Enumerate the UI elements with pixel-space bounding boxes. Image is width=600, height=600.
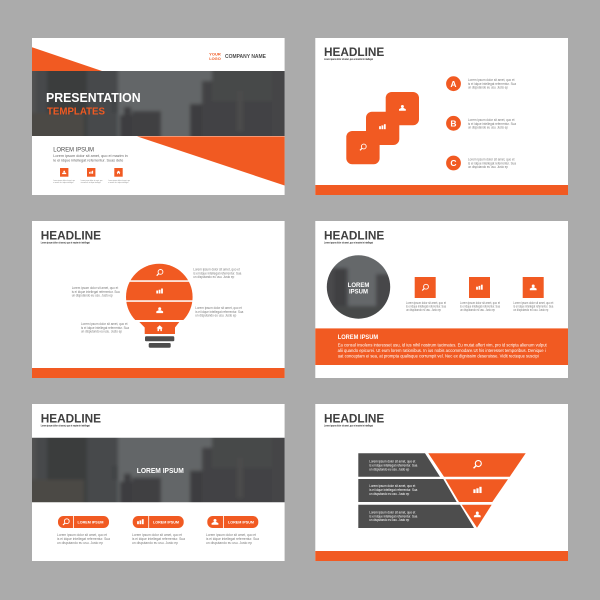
text upper left: un disputando eu usu. Justo ep — [72, 294, 113, 298]
heading: Lorem ipsum dolor sit amet, quo ei mazim in intellegat — [41, 425, 90, 428]
company logo — [209, 52, 221, 61]
city photo band — [32, 71, 285, 136]
funnel row 1 — [358, 453, 526, 477]
icon square 3 — [114, 168, 123, 177]
small captions: Lorem ipsum dolor sit amet, quo — [81, 179, 103, 182]
panel: circle photo slide — [315, 221, 568, 378]
pill button 2: LOREM IPSUM — [153, 520, 179, 524]
item A: is ei idque intellegat referrentur. Sua — [468, 82, 516, 86]
funnel row 3 — [358, 505, 492, 528]
item C — [446, 156, 516, 170]
item A: un disputando eu usu. Justo ep — [468, 86, 508, 90]
feature: bars: un disputando eu usu. Justo ep — [460, 308, 495, 312]
city photo band — [32, 438, 285, 502]
circle label: IPSUM — [349, 290, 368, 296]
banner label: LOREM IPSUM — [137, 466, 184, 475]
item A: Lorem ipsum dolor sit amet, quo et — [468, 78, 515, 82]
item C: C — [450, 158, 457, 168]
funnel row 3: Lorem ipsum dolor sit amet, quo et — [369, 510, 415, 514]
company logo: YOUR — [209, 52, 221, 57]
text upper left: is ei idque intellegat referrentur. Sua — [72, 290, 120, 294]
heading: Lorem ipsum dolor sit amet, quo ei mazim in intellegat — [324, 241, 373, 244]
item B: un disputando eu usu. Justo ep — [468, 126, 508, 130]
small captions: ei mazim le ei idque intellegat — [81, 181, 101, 184]
circle label: LOREM — [348, 283, 369, 289]
caption 3 — [206, 533, 259, 545]
text lower right: un disputando eu usu. Justo ep — [195, 314, 236, 318]
feature: search: Lorem ipsum dolor sit amet, quo et — [406, 301, 446, 305]
pill button 1: LOREM IPSUM — [77, 520, 104, 524]
heading: Lorem ipsum dolor sit amet, quo ei mazim in intellegat — [324, 425, 373, 428]
feature: bars: is ei idque intellegat referrentur. Sua — [460, 304, 500, 308]
orange lower wedge — [137, 136, 285, 186]
intro text: le ei idque intellegat referrentur. Suas dete — [53, 158, 123, 163]
orange text band: Ea consul insolens interesset usu, id ius nihil nostrum tacimates. Eu mutat affert vim, pro id scripta alienum vulput — [338, 342, 548, 347]
heading: HEADLINE — [324, 228, 384, 242]
caption 2: is ei idque intellegat referrentur. Sua — [132, 537, 185, 541]
pill button 1 — [58, 516, 109, 528]
text top right: Lorem ipsum dolor sit amet, quo et — [193, 268, 240, 272]
heading: Lorem ipsum dolor sit amet, quo ei mazim in intellegat — [324, 58, 373, 61]
intro text: Lorem ipsum dolor sit amet, quo ei mazim in — [53, 153, 128, 158]
caption 3: is ei idque intellegat referrentur. Sua — [206, 537, 259, 541]
small captions: Lorem ipsum dolor sit amet, quo — [108, 179, 131, 182]
feature: search: is ei idque intellegat referrentur. Sua — [406, 304, 446, 308]
text top right: is ei idque intellegat referrentur. Sua — [193, 271, 241, 275]
footer bar — [32, 368, 285, 378]
company logo: LOGO — [209, 56, 221, 61]
text upper left — [72, 286, 120, 298]
feature: bars: Lorem ipsum dolor sit amet, quo et — [460, 301, 500, 305]
text upper left: Lorem ipsum dolor sit amet, quo et — [72, 286, 118, 290]
caption 2 — [132, 533, 185, 545]
text top right — [193, 268, 241, 279]
caption 3: Lorem ipsum dolor sit amet, quo et — [206, 533, 256, 537]
caption 2: un disputando eu usu. Justo ep — [132, 541, 178, 545]
small captions — [53, 179, 131, 184]
item A: A — [450, 79, 457, 89]
panel: funnel slide — [315, 404, 568, 561]
pill button 3: LOREM IPSUM — [228, 520, 254, 524]
circle label — [348, 283, 369, 296]
heading: Lorem ipsum dolor sit amet, quo ei mazim in intellegat — [41, 241, 90, 244]
funnel row 2: un disputando eu usu. Justo ep — [369, 492, 409, 496]
footer bar — [315, 185, 568, 195]
feature: person — [513, 277, 553, 312]
funnel row 1: Lorem ipsum dolor sit amet, quo et — [369, 460, 415, 464]
heading: HEADLINE — [41, 412, 101, 426]
funnel row 2 — [358, 479, 508, 502]
rounded square: search — [346, 131, 380, 164]
panel: light bulb slide — [32, 221, 285, 378]
feature: search — [406, 277, 446, 312]
pill button 3 — [207, 516, 258, 528]
caption 1: un disputando eu usu. Justo ep — [57, 541, 103, 545]
heading: HEADLINE — [324, 412, 384, 426]
caption 3: un disputando eu usu. Justo ep — [206, 541, 252, 545]
text lower right: Lorem ipsum dolor sit amet, quo et — [195, 306, 242, 310]
intro text — [53, 153, 128, 163]
icon square 1 — [60, 168, 68, 177]
panel: photo banner slide — [22, 404, 297, 561]
text lower right: is ei idque intellegat referrentur. Sua — [195, 310, 243, 314]
item C: is ei idque intellegat referrentur. Sua — [468, 161, 516, 165]
heading: HEADLINE — [324, 45, 384, 59]
heading: HEADLINE — [41, 228, 101, 242]
item B: is ei idque intellegat referrentur. Sua — [468, 122, 516, 126]
caption 1: Lorem ipsum dolor sit amet, quo et — [57, 533, 107, 537]
item A — [446, 76, 516, 91]
icon square 2 — [87, 168, 95, 177]
caption 1: is ei idque intellegat referrentur. Sua — [57, 537, 110, 541]
feature: search: un disputando eu usu. Justo ep — [406, 308, 441, 312]
pill button 2 — [133, 516, 184, 528]
light bulb — [126, 264, 193, 348]
item C: Lorem ipsum dolor sit amet, quo et — [468, 158, 515, 162]
small captions: Lorem ipsum dolor sit amet, quo — [53, 179, 76, 182]
subtitle: TEMPLATES — [47, 107, 105, 118]
funnel row 1: un disputando eu usu. Justo ep — [369, 467, 409, 471]
funnel row 1: is ei idque intellegat referrentur. Sua — [369, 464, 417, 468]
funnel row 2: is ei idque intellegat referrentur. Sua — [369, 488, 417, 492]
text lower left: Lorem ipsum dolor sit amet, quo et — [81, 322, 128, 326]
panel: cover slide — [22, 38, 297, 195]
orange text band: alii quando epicurei. Ut eum lorem rationibus. In ius nobis accommodare.Ut his interesset temporibus. Denique i — [338, 348, 546, 353]
text lower left: un disputando eu usu. Justo ep — [81, 330, 122, 334]
caption 2: Lorem ipsum dolor sit amet, quo et — [132, 533, 182, 537]
panel: ABC steps slide — [315, 38, 568, 195]
item B: Lorem ipsum dolor sit amet, quo et — [468, 118, 515, 122]
feature: person: un disputando eu usu. Justo ep — [513, 308, 548, 312]
text lower right — [195, 306, 243, 318]
text lower left: is ei idque intellegat referrentur. Sua — [81, 326, 129, 330]
rounded square: person — [386, 92, 419, 125]
item B — [446, 116, 516, 131]
feature: bars — [460, 277, 500, 312]
text lower left — [81, 322, 129, 334]
text top right: un disputando eu usu. Justo ep — [193, 275, 234, 279]
funnel row 3: is ei idque intellegat referrentur. Sua — [369, 514, 417, 518]
lorem heading: LOREM IPSUM — [53, 146, 94, 153]
funnel row 3: un disputando eu usu. Justo ep — [369, 518, 409, 522]
circular photo — [326, 255, 390, 319]
title: PRESENTATION — [46, 90, 141, 105]
funnel row 2: Lorem ipsum dolor sit amet, quo et — [369, 484, 415, 488]
feature: person: is ei idque intellegat referrentur. Sua — [513, 304, 553, 308]
orange text band — [315, 328, 568, 365]
company name: COMPANY NAME — [225, 54, 267, 60]
caption 1 — [57, 533, 110, 545]
item C: un disputando eu usu. Justo ep — [468, 165, 508, 169]
orange text band: LOREM IPSUM — [338, 334, 378, 341]
footer bar — [315, 551, 568, 561]
small captions: ei mazim le ei idque intellegat — [53, 181, 74, 184]
rounded square: bars — [366, 112, 399, 145]
orange top triangle — [32, 47, 102, 71]
orange text band: uat conceptam ei sea, at prompta qualisque corrumpit vel. Nec ex dignissim deseruisse. Vidit recteque suscipi — [338, 354, 539, 359]
feature: person: Lorem ipsum dolor sit amet, quo et — [513, 301, 553, 305]
item B: B — [450, 118, 457, 128]
small captions: ei mazim le ei idque intellegat — [108, 181, 129, 184]
